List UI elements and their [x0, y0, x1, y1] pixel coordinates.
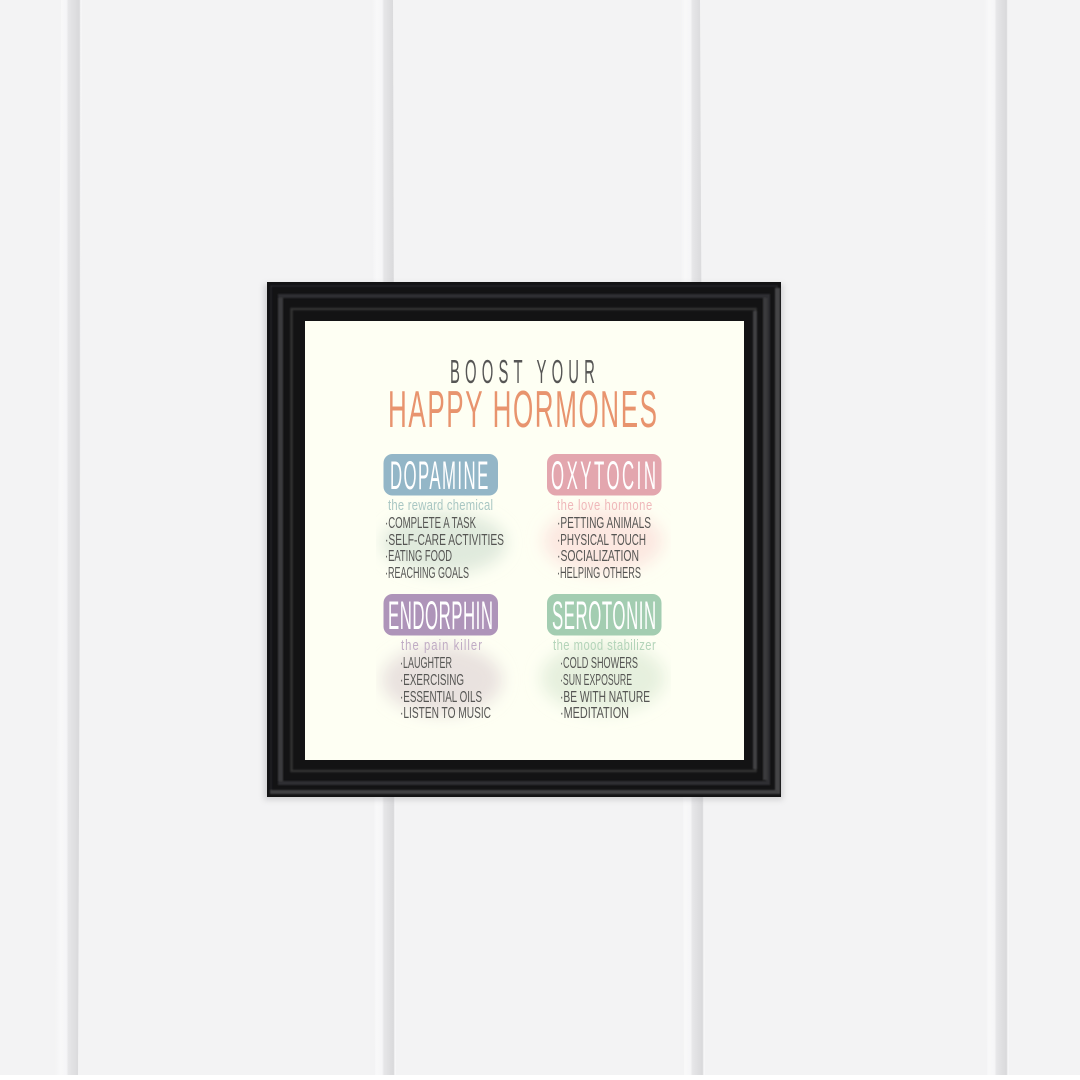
- list: oxytocin: ·HELPING OTHERS: [557, 565, 641, 582]
- subtitle: dopamine: the reward chemical: [388, 496, 493, 513]
- list: oxytocin: ·SOCIALIZATION: [557, 548, 639, 565]
- list: serotonin: ·SUN EXPOSURE: [560, 672, 632, 689]
- frame mouldings: [270, 286, 780, 794]
- list: serotonin: ·COLD SHOWERS: [560, 655, 638, 672]
- blob: serotonin: [541, 643, 665, 713]
- subtitle: oxytocin: the love hormone: [557, 496, 652, 513]
- list: dopamine: ·EATING FOOD: [385, 548, 452, 565]
- list: oxytocin: ·PHYSICAL TOUCH: [557, 532, 646, 549]
- pill: dopamine: DOPAMINE: [390, 454, 488, 498]
- list: endorphin: ·LISTEN TO MUSIC: [400, 705, 491, 722]
- list: oxytocin: ·PETTING ANIMALS: [557, 515, 651, 532]
- list: endorphin: ·LAUGHTER: [400, 655, 452, 672]
- list: serotonin: ·BE WITH NATURE: [560, 689, 650, 706]
- subtitle: endorphin: the pain killer: [401, 636, 482, 653]
- blob: endorphin: [382, 645, 502, 715]
- blob: oxytocin: [543, 508, 663, 574]
- list: serotonin: [560, 655, 650, 722]
- list: dopamine: ·SELF-CARE ACTIVITIES: [385, 532, 504, 549]
- list: endorphin: [400, 655, 491, 722]
- poster: [305, 321, 744, 760]
- title: boost your: BOOST YOUR: [450, 355, 595, 391]
- subtitle: serotonin: the mood stabilizer: [553, 636, 656, 653]
- list: dopamine: [385, 515, 504, 582]
- blob: dopamine: [382, 512, 506, 574]
- pill: oxytocin: OXYTOCIN: [551, 454, 656, 498]
- panel: dopamine: [382, 454, 506, 582]
- list: oxytocin: [557, 515, 651, 582]
- panel: endorphin: [382, 594, 502, 722]
- panel: serotonin: [541, 594, 665, 722]
- poster contents: [382, 355, 665, 722]
- frame shadow: [264, 284, 783, 800]
- picture frame: [267, 282, 781, 797]
- panel: oxytocin: [543, 454, 663, 582]
- list: dopamine: ·COMPLETE A TASK: [385, 515, 476, 532]
- list: serotonin: ·MEDITATION: [560, 705, 629, 722]
- pill: endorphin: ENDORPHIN: [388, 594, 493, 638]
- list: dopamine: ·REACHING GOALS: [385, 565, 469, 582]
- list: endorphin: ·ESSENTIAL OILS: [400, 689, 482, 706]
- title: happy hormones: HAPPY HORMONES: [388, 380, 657, 438]
- list: endorphin: ·EXERCISING: [400, 672, 464, 689]
- pill: serotonin: SEROTONIN: [552, 594, 656, 638]
